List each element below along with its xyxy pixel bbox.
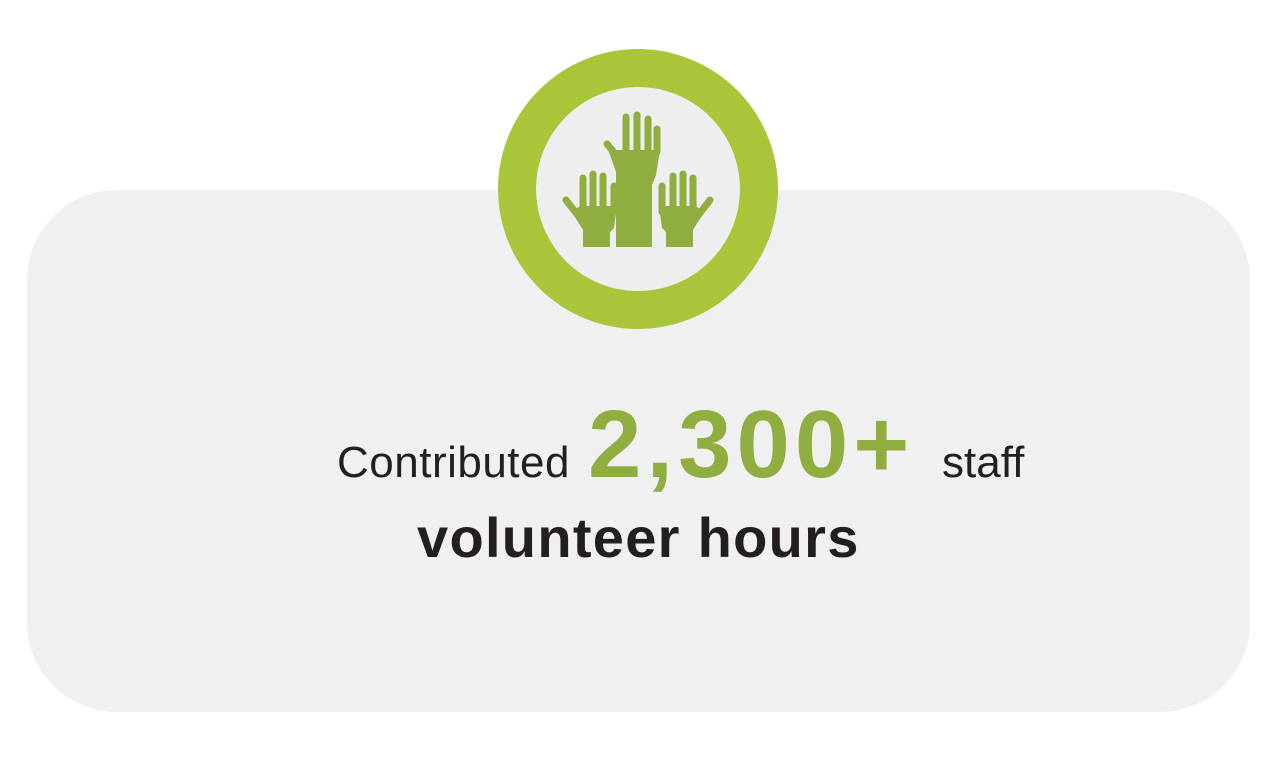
- text: Contributed: Contributed: [337, 438, 570, 487]
- panel: background card: [27, 190, 1250, 712]
- text: 2,300+ number: 2,300+: [588, 391, 914, 498]
- text: volunteer hours: volunteer hours: [417, 506, 860, 569]
- text: staff: staff: [942, 438, 1024, 487]
